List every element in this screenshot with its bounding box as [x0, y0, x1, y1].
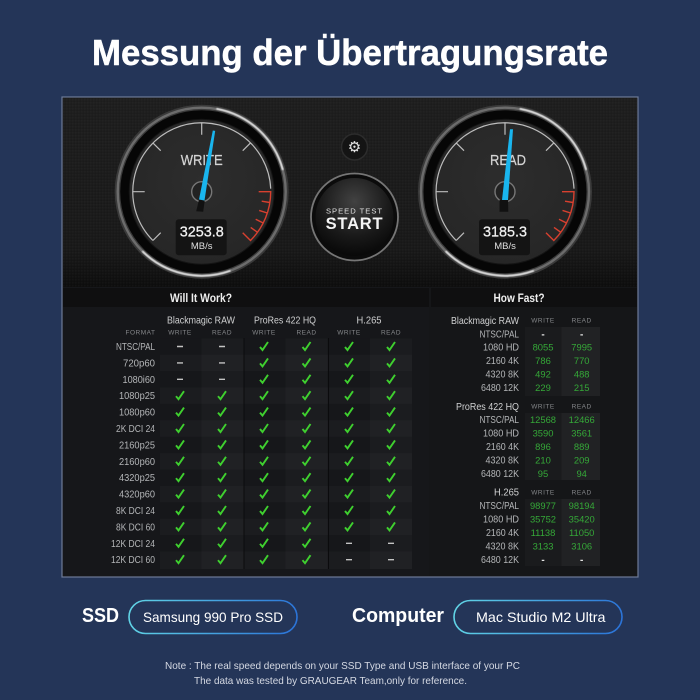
group: blackmagic raw speeds — [451, 315, 592, 394]
format labels — [111, 341, 155, 566]
format labels: NTSC/PAL — [116, 341, 155, 353]
group: prores speeds: 889 — [574, 441, 590, 452]
group: prores speeds: 12466 — [569, 414, 595, 425]
pill: mac studio m2 ultra: Mac Studio M2 Ultra — [476, 609, 606, 625]
group: blackmagic raw speeds: 229 — [535, 382, 551, 393]
codec headers: READ — [381, 330, 401, 336]
panel: how fast — [431, 287, 637, 576]
group: h.265 speeds: 3133 — [533, 540, 553, 551]
button: speed test start: SPEED TEST — [326, 206, 383, 216]
format labels: 1080p25 — [119, 390, 155, 402]
group: h.265 speeds: 35420 — [569, 514, 595, 525]
group: h.265 speeds: 4320 8K — [486, 540, 519, 552]
result check marks — [176, 342, 395, 563]
codec headers: WRITE — [337, 330, 361, 336]
group: h.265 speeds: 3106 — [571, 540, 592, 551]
label: ssd: SSD — [82, 605, 119, 627]
group: prores speeds: 94 — [576, 468, 587, 479]
gauge: write — [115, 105, 289, 279]
button: speed test start: START — [326, 215, 383, 233]
group: h.265 speeds: 11050 — [569, 527, 594, 538]
label: computer: Computer — [352, 605, 444, 627]
group: prores speeds: 12568 — [530, 414, 556, 425]
group: blackmagic raw speeds: Blackmagic RAW — [451, 315, 519, 327]
gauge: write: MB/s — [191, 241, 213, 252]
group: prores speeds: 4320 8K — [486, 454, 519, 466]
icon: settings gear — [342, 134, 368, 160]
group: blackmagic raw speeds: 2160 4K — [486, 355, 519, 367]
codec headers: READ — [296, 330, 317, 336]
cell shading — [525, 327, 600, 566]
group: prores speeds: WRITE — [531, 404, 555, 410]
group: prores speeds: 95 — [538, 468, 548, 479]
group: h.265 speeds: - — [580, 555, 583, 566]
format labels: 2160p60 — [119, 456, 155, 468]
group: h.265 speeds: 98194 — [569, 500, 595, 511]
format labels: 8K DCI 24 — [116, 505, 155, 517]
format labels: 1080p60 — [119, 407, 155, 419]
format labels: 2K DCI 24 — [116, 423, 155, 435]
group: blackmagic raw speeds: 786 — [535, 355, 551, 366]
group: blackmagic raw speeds: 215 — [574, 382, 590, 393]
group: blackmagic raw speeds: WRITE — [531, 318, 555, 324]
group: blackmagic raw speeds: 770 — [574, 355, 590, 366]
format labels: 8K DCI 60 — [116, 521, 155, 533]
group: prores speeds — [456, 401, 595, 480]
panel: will it work — [63, 287, 429, 576]
group: prores speeds: 3590 — [533, 428, 553, 439]
group: h.265 speeds — [480, 486, 595, 566]
codec headers: ProRes 422 HQ — [254, 314, 316, 326]
group: blackmagic raw speeds: 7995 — [571, 342, 592, 353]
group: blackmagic raw speeds: - — [541, 329, 545, 340]
group: blackmagic raw speeds: - — [580, 329, 583, 340]
codec headers: H.265 — [356, 314, 382, 326]
panel: gauge area — [63, 98, 637, 287]
format labels: 720p60 — [123, 357, 155, 369]
heading: will it work: Will It Work? — [170, 293, 232, 305]
column shading — [562, 327, 600, 566]
gauge: read: MB/s — [494, 241, 516, 252]
title: Messung der Übertragungsrate — [92, 32, 608, 73]
group: blackmagic raw speeds: 6480 12K — [481, 382, 519, 394]
note text: Note : The real speed depends on your SSD Type and USB interface of your PC — [165, 660, 520, 672]
gauge: write: WRITE — [181, 152, 223, 169]
group: h.265 speeds: - — [541, 555, 545, 566]
format labels: 4320p25 — [119, 472, 155, 484]
gauge: write: 3253.8 — [180, 225, 224, 241]
codec headers: READ — [212, 330, 232, 336]
codec headers — [126, 314, 401, 336]
gauge: read: 3185.3 — [483, 225, 527, 241]
group: prores speeds: 6480 12K — [481, 468, 519, 480]
gauge: read: READ — [490, 152, 526, 169]
codec headers: FORMAT — [126, 330, 156, 336]
icon: settings gear: ⚙ — [348, 138, 361, 156]
group: prores speeds: READ — [572, 404, 592, 410]
group: prores speeds: 210 — [535, 454, 551, 465]
group: blackmagic raw speeds: NTSC/PAL — [480, 328, 519, 340]
group: h.265 speeds: 2160 4K — [486, 527, 519, 539]
panel: disk speed test app — [62, 97, 638, 577]
table cell shading — [160, 338, 412, 569]
group: prores speeds: ProRes 422 HQ — [456, 401, 519, 413]
format labels: 1080i60 — [122, 374, 155, 386]
heading: how fast: How Fast? — [494, 293, 544, 305]
pill: samsung 990 pro ssd — [129, 600, 297, 634]
format labels: 2160p25 — [119, 439, 155, 451]
group: h.265 speeds: 35752 — [530, 514, 556, 525]
group: h.265 speeds: 98977 — [530, 500, 556, 511]
group: blackmagic raw speeds: 1080 HD — [483, 342, 519, 354]
group: blackmagic raw speeds: 8055 — [533, 342, 553, 353]
pill: samsung 990 pro ssd: Samsung 990 Pro SSD — [143, 609, 283, 625]
group: h.265 speeds: 11138 — [531, 527, 555, 538]
codec headers: Blackmagic RAW — [167, 314, 235, 326]
format labels: 4320p60 — [119, 489, 155, 501]
group: h.265 speeds: READ — [572, 490, 592, 496]
codec headers: WRITE — [252, 330, 276, 336]
group: blackmagic raw speeds: READ — [572, 318, 592, 324]
format labels: 12K DCI 60 — [111, 554, 155, 566]
group: prores speeds: 209 — [574, 454, 590, 465]
group: h.265 speeds: H.265 — [494, 486, 519, 498]
group: prores speeds: 2160 4K — [486, 441, 519, 453]
group: h.265 speeds: 1080 HD — [483, 514, 519, 526]
group: prores speeds: NTSC/PAL — [480, 414, 519, 426]
button: speed test start — [311, 174, 398, 260]
group: prores speeds: 896 — [535, 441, 551, 452]
group: blackmagic raw speeds: 492 — [535, 369, 551, 380]
gauge: read — [418, 105, 592, 279]
group: prores speeds: 1080 HD — [483, 428, 519, 440]
format labels: 12K DCI 24 — [111, 538, 155, 550]
pill: mac studio m2 ultra — [454, 600, 622, 634]
group: h.265 speeds: WRITE — [531, 490, 555, 496]
note text: The data was tested by GRAUGEAR Team,only for reference. — [194, 675, 467, 687]
group: prores speeds: 3561 — [571, 428, 592, 439]
group: h.265 speeds: 6480 12K — [481, 554, 519, 566]
group: h.265 speeds: NTSC/PAL — [480, 500, 519, 512]
group: blackmagic raw speeds: 488 — [574, 369, 590, 380]
group: blackmagic raw speeds: 4320 8K — [486, 369, 519, 381]
codec headers: WRITE — [168, 330, 192, 336]
note text — [165, 660, 520, 687]
result dashes — [177, 346, 394, 560]
